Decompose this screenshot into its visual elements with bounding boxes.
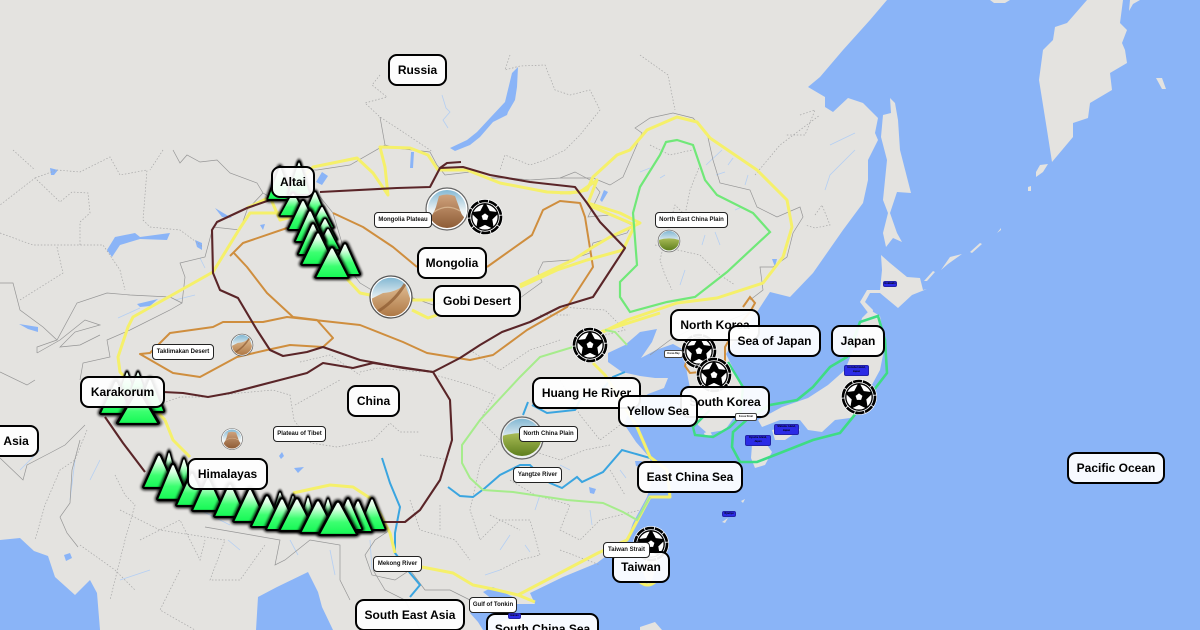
small label: Yangtze River — [513, 467, 562, 483]
small label: North China Plain — [519, 426, 578, 442]
small label: Taiwan Strait — [603, 542, 650, 558]
label: South East Asia — [355, 599, 465, 630]
label: Karakorum — [80, 376, 165, 408]
label: Taiwan: Taiwan — [621, 560, 661, 574]
icon: Beijing wheel marker — [572, 327, 608, 363]
small rivers — [20, 95, 855, 580]
boundary: yellow route — [118, 117, 792, 602]
label: Central Asia — [0, 425, 39, 457]
small label: Gulf of Tonkin — [469, 597, 517, 613]
blue tag: Hainan — [508, 613, 521, 619]
icon: North East China Plain photo — [658, 230, 680, 252]
label: Himalayas — [187, 458, 268, 490]
small label: Mongolia Plateau — [374, 212, 432, 228]
label: Gobi Desert: Gobi Desert — [443, 294, 511, 308]
label: South China Sea — [486, 613, 599, 630]
label: Russia: Russia — [398, 63, 437, 77]
small label: Mekong River: Mekong River — [378, 561, 417, 567]
label: East China Sea: East China Sea — [647, 470, 733, 484]
small label: Mongolia Plateau: Mongolia Plateau — [378, 217, 428, 223]
icon: Tokyo wheel marker — [841, 379, 877, 415]
label: Pacific Ocean — [1067, 452, 1165, 484]
land islands — [500, 0, 1166, 630]
small label: Taklimakan Desert: Taklimakan Desert — [157, 349, 209, 355]
small label: North East China Plain — [655, 212, 728, 228]
boundary: North East China Plain (green) — [620, 140, 770, 312]
small label: Plateau of Tibet: Plateau of Tibet — [277, 431, 322, 437]
label: North Korea: North Korea — [680, 318, 750, 332]
small label: Gulf of Tonkin: Gulf of Tonkin — [473, 602, 513, 608]
regional borders — [0, 55, 830, 630]
label: South Korea — [680, 386, 770, 418]
country borders — [0, 113, 803, 630]
icon: Mongolia Plateau photo — [426, 188, 468, 230]
river: Huang He — [523, 372, 625, 415]
label: Altai: Altai — [280, 175, 306, 189]
label: Gobi Desert — [433, 285, 521, 317]
label: Yellow Sea: Yellow Sea — [627, 404, 689, 418]
blue tag: Honshu — [844, 365, 869, 376]
icon: Pyongyang wheel marker — [681, 333, 717, 369]
label: Japan: Japan — [841, 334, 875, 348]
blue tag: Kyushu — [745, 435, 771, 446]
blue tag: Shikoku — [774, 424, 799, 435]
small label: Yangtze River: Yangtze River — [518, 472, 557, 478]
label: North Korea — [670, 309, 760, 341]
label: South East Asia: South East Asia — [365, 608, 455, 622]
blue tag: Hainan: Hainan — [510, 614, 519, 617]
label: South Korea: South Korea — [689, 395, 761, 409]
tiny label: Korea Strait: Korea Strait — [739, 415, 753, 418]
boundary: China (brown) — [105, 162, 625, 522]
icon: Seoul wheel marker — [696, 357, 732, 393]
boundary: Korea (orange) — [685, 297, 755, 373]
label: Mongolia: Mongolia — [426, 256, 478, 270]
icon: Mongolia wheel marker — [467, 199, 503, 235]
label: China: China — [357, 394, 390, 408]
boundary: North China Plain (light green) — [462, 330, 650, 520]
mountains: Karakorum — [100, 372, 164, 424]
label: Russia — [388, 54, 447, 86]
label: Pacific Ocean: Pacific Ocean — [1077, 461, 1155, 475]
label: Karakorum: Karakorum — [91, 385, 154, 399]
lakes — [19, 67, 777, 561]
river: Mekong — [382, 458, 420, 597]
blue tag: Shikoku: Shikoku Island, Japan — [777, 425, 796, 432]
blue tag: Ryukyu — [722, 511, 736, 517]
blue tag: Hokkaido: Hokkaido — [884, 282, 896, 285]
blue tag: Kyushu: Kyushu Island, Japan — [749, 436, 767, 443]
icon: Taiwan wheel marker — [633, 526, 669, 562]
label: Sea of Japan: Sea of Japan — [737, 334, 812, 348]
label: Mongolia — [417, 247, 487, 279]
mountains: Altai — [267, 162, 360, 278]
label: Taiwan — [612, 551, 670, 583]
small label: Mekong River — [373, 556, 422, 572]
blue tag: Hokkaido — [883, 281, 897, 287]
boundary: Japan (teal green) — [732, 316, 887, 462]
label: Yellow Sea — [618, 395, 698, 427]
label: Sea of Japan — [728, 325, 821, 357]
mountains: Himalayas — [143, 452, 385, 535]
small label: Plateau of Tibet — [273, 426, 326, 442]
label: Himalayas: Himalayas — [198, 467, 257, 481]
label: Huang He River: Huang He River — [542, 386, 631, 400]
small label: Taklimakan Desert — [152, 344, 214, 360]
icon: Plateau of Tibet photo — [222, 428, 242, 450]
small label: Taiwan Strait: Taiwan Strait — [608, 547, 645, 553]
tiny label: Korea Strait — [735, 413, 757, 421]
icon: North China Plain photo — [501, 417, 543, 459]
tiny label: Korea Bay: Korea Bay — [667, 352, 680, 355]
label: China — [347, 385, 400, 417]
boundary: Korea (teal green) — [693, 362, 743, 437]
icon: Gobi Desert photo — [370, 276, 412, 318]
label: East China Sea — [637, 461, 743, 493]
label: Japan — [831, 325, 885, 357]
label: Huang He River — [532, 377, 641, 409]
icon: Taklimakan Desert photo — [231, 334, 253, 356]
tiny label: Korea Bay — [664, 350, 683, 358]
boundary: Gobi and Taklimakan (orange) — [140, 201, 593, 377]
small label: North China Plain: North China Plain — [523, 431, 574, 437]
blue tag: Ryukyu: Ryukyu — [724, 512, 734, 515]
river: Yangtze — [448, 450, 650, 497]
label: Altai — [271, 166, 315, 198]
blue tag: Honshu: Honshu Island, Japan — [848, 366, 865, 373]
small label: North East China Plain: North East China Plain — [659, 217, 724, 223]
